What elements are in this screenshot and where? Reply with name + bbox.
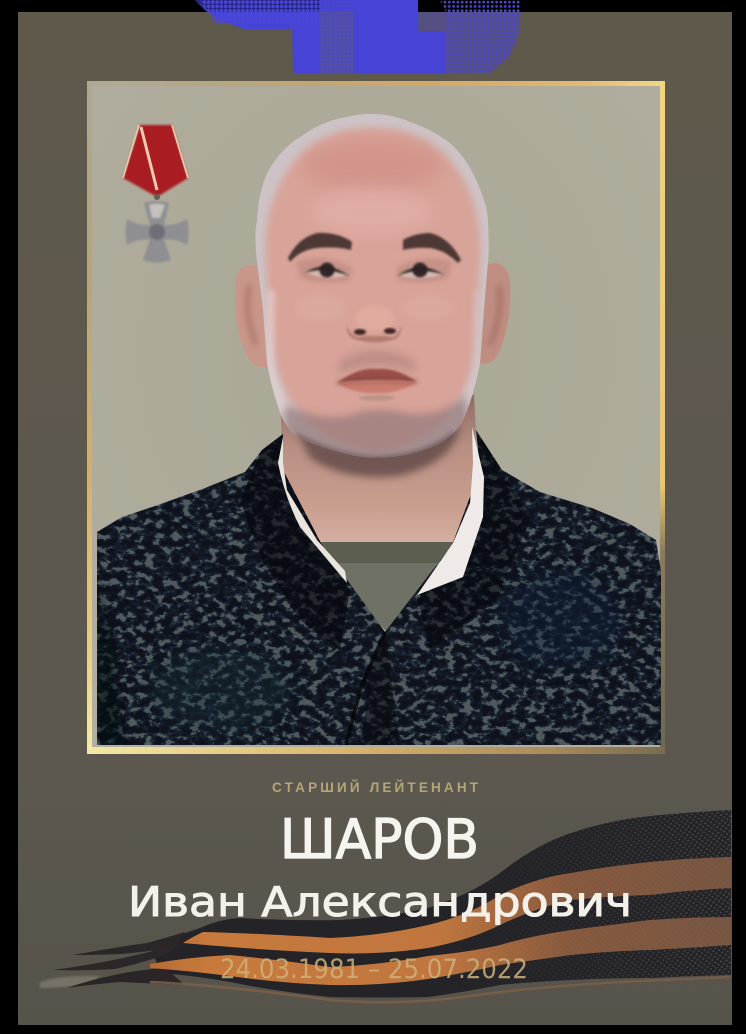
forehead light [318,188,426,231]
nose [347,305,401,342]
eyes [304,262,444,278]
left ear [235,265,270,367]
skin [265,128,481,452]
t-shirt [315,542,455,632]
jacket shading [97,580,125,745]
halftone fade [461,810,731,986]
rank label: СТАРШИЙ ЛЕЙТЕНАНТ [272,780,479,795]
upper orange band [183,857,731,953]
tail strips [73,932,185,955]
dates of life: 24.03.1981 – 25.07.2022 [220,954,528,985]
head base [250,110,495,460]
white undershirt collar [278,427,484,595]
right ear [478,263,510,364]
medal: order of courage [123,125,188,262]
head and face [250,110,495,470]
saint george ribbon [40,800,731,1005]
silver cross [126,194,188,262]
eye sockets [296,258,352,283]
neck [280,395,478,546]
neck shadow under chin [297,425,460,477]
pixelated blue censor blob [195,0,521,73]
scalp redness [306,140,438,186]
gold frame [87,81,665,754]
lower orange band [150,917,731,985]
ribbon pentagon [123,125,188,197]
black band [150,810,731,998]
pale tail smear [40,976,100,988]
uniform jacket [90,425,665,750]
stubble on jaw and chin [285,395,470,463]
portrait of the officer [90,110,665,750]
photo background [87,81,665,754]
chin crease [359,395,395,401]
eyebrows [288,233,461,263]
surname: ШАРОВ [280,808,479,871]
moustache shade [338,350,415,374]
side highlights [270,290,284,412]
given name and patronymic: Иван Александрович [128,878,632,926]
under-eye highlights [294,294,346,322]
mouth [337,369,417,393]
placket [362,636,399,745]
thin lower edge [150,977,731,1002]
